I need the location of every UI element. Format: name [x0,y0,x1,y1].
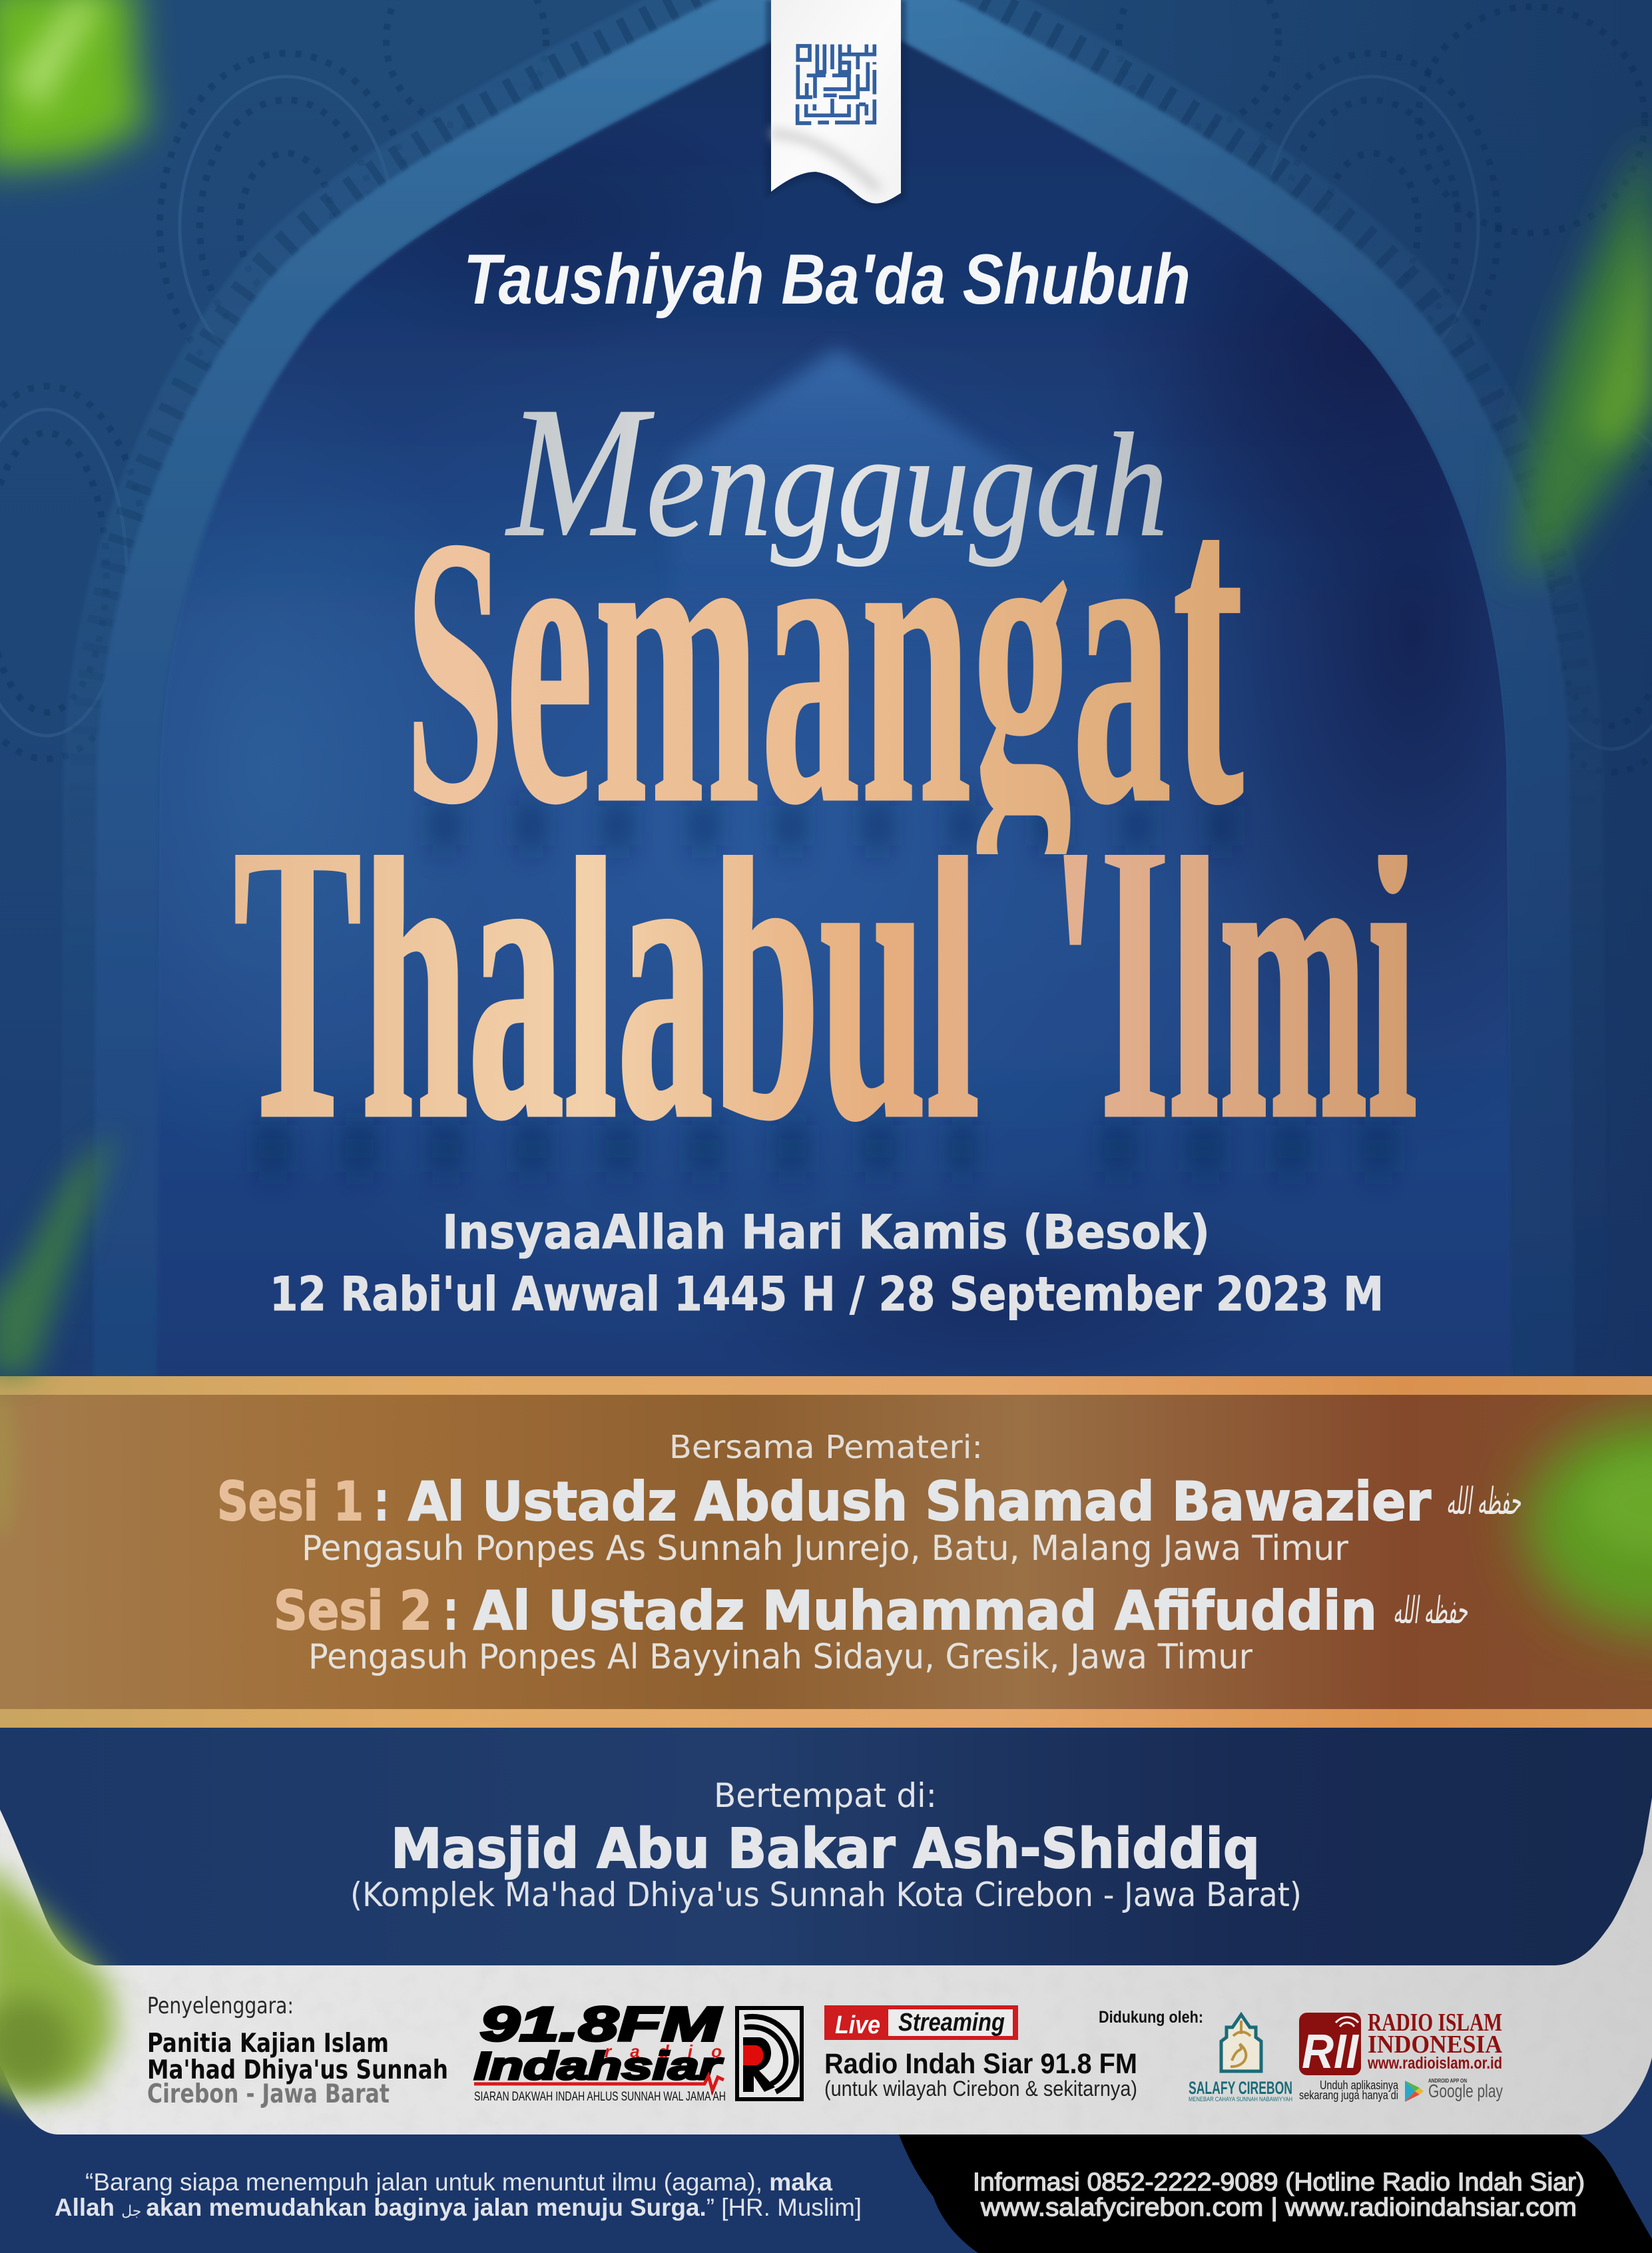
badge: live streaming [824,2005,1018,2040]
logo: Radio Islam Indonesia: www.radioislam.or.id [1367,2054,1502,2073]
text: venue label: Bertempat di: [714,1776,937,1815]
panel: sponsors backing [0,1798,1652,2137]
logo: R emblem [737,2008,802,2099]
logo: Radio Indah Siar: 91.8FM [480,1998,722,2051]
logo: Radio Indah Siar: Indahsiar [474,2045,724,2088]
text block: radio frequency [824,2048,1137,2101]
panel: speakers [0,1376,1652,1728]
icon: Google Play: ANDROID APP ON [1428,2078,1467,2084]
icon: kufi basmala [798,45,874,123]
text block: organiser: Panitia Kajian Islam [147,2029,389,2059]
text block: app download [1299,2079,1399,2102]
speaker 1: : [374,1471,389,1533]
text: hotline: Informasi 0852-2222-9089 (Hotline Radio Indah Siar) [973,2168,1585,2196]
heading: session type: Taushiyah Ba'da Shubuh [463,239,1191,319]
logo: Radio Islam Indonesia: INDONESIA [1368,2031,1503,2059]
text block: organiser [147,1993,448,2109]
title shadows [253,826,1418,1148]
panel: speakers: Pengasuh Ponpes As Sunnah Junrejo, Batu, Malang Jawa Timur [302,1529,1349,1569]
speaker 2: : [443,1580,458,1642]
text: supported by: Didukung oleh: [1099,2008,1203,2027]
speaker 1: Sesi 1 [217,1471,364,1533]
quote text [55,2168,862,2221]
logo: Radio Islam Indonesia: RII [1302,2025,1360,2079]
text block: radio frequency: Radio Indah Siar 91.8 FM [824,2048,1137,2080]
quote text: “Barang siapa menempuh jalan untuk menuntut ilmu (agama), maka [85,2168,832,2196]
text block: organiser: Penyelenggara: [147,1993,294,2019]
panel: speakers: Pengasuh Ponpes Al Bayyinah Sidayu, Gresik, Jawa Timur [308,1637,1253,1677]
text: venue name: Masjid Abu Bakar Ash-Shiddiq [391,1818,1260,1881]
text block: radio frequency: (untuk wilayah Cirebon & sekitarnya) [824,2077,1137,2101]
bottom navy background [0,1728,1652,2253]
logo: Salafy Cirebon: SALAFY CIREBON [1189,2078,1292,2098]
logo: Salafy Cirebon [1189,2015,1292,2103]
date text [270,1205,1384,1322]
title: Thalabul 'Ilmi [235,855,1416,1122]
logo: Radio Islam Indonesia [1299,2009,1503,2079]
ornamental medallions [0,0,1652,772]
text block: app download: Unduh aplikasinya [1320,2079,1399,2092]
quote text: Allah جل akan memudahkan baginya jalan menuju Surga.” [HR. Muslim] [55,2194,862,2221]
speaker 2: Sesi 2 [274,1580,432,1642]
icon: Google Play [1405,2078,1503,2102]
panel: speakers: حفظه الله [1393,1589,1468,1632]
background: mosque arch [0,0,1652,1411]
speaker 1: Al Ustadz Abdush Shamad Bawazier [408,1471,1432,1533]
text: venue address: (Komplek Ma'had Dhiya'us Sunnah Kota Cirebon - Jawa Barat) [350,1876,1302,1914]
logo: Radio Indah Siar: radio [605,2041,722,2061]
logo: Salafy Cirebon: MENEBAR CAHAYA SUNNAH NABAWIYYAH [1189,2096,1292,2103]
panel: speakers: حفظه الله [1446,1480,1521,1523]
date text: InsyaaAllah Hari Kamis (Besok) [442,1205,1210,1260]
logo: Radio Indah Siar: SIARAN DAKWAH INDAH AHLUS SUNNAH WAL JAMA'AH [474,2090,726,2104]
badge: live streaming: Live [835,2011,880,2039]
badge: live streaming: Streaming [898,2009,1005,2037]
text block: app download: sekarang juga hanya di [1299,2089,1398,2102]
panel: venue [0,1728,1652,1965]
text: speakers label: Bersama Pemateri: [669,1429,983,1466]
title: script line: Menggugah [505,368,1168,575]
icon: Google Play: Google play [1428,2081,1503,2101]
leaf: right band [0,1391,1652,1631]
text block: organiser: Cirebon - Jawa Barat [147,2079,390,2109]
speaker 2: Al Ustadz Muhammad Afifuddin [473,1580,1377,1642]
logo: Radio Indah Siar [474,1998,726,2104]
logo: Radio Islam Indonesia: RADIO ISLAM [1368,2009,1502,2037]
ribbon with kufi calligraphy [766,0,906,208]
panel: hotline black [899,2134,1652,2253]
text: websites: www.salafycirebon.com | www.radioindahsiar.com [980,2194,1577,2222]
date text: 12 Rabi'ul Awwal 1445 H / 28 September 2023 M [270,1267,1384,1322]
text block: organiser: Ma'had Dhiya'us Sunnah [147,2055,448,2085]
